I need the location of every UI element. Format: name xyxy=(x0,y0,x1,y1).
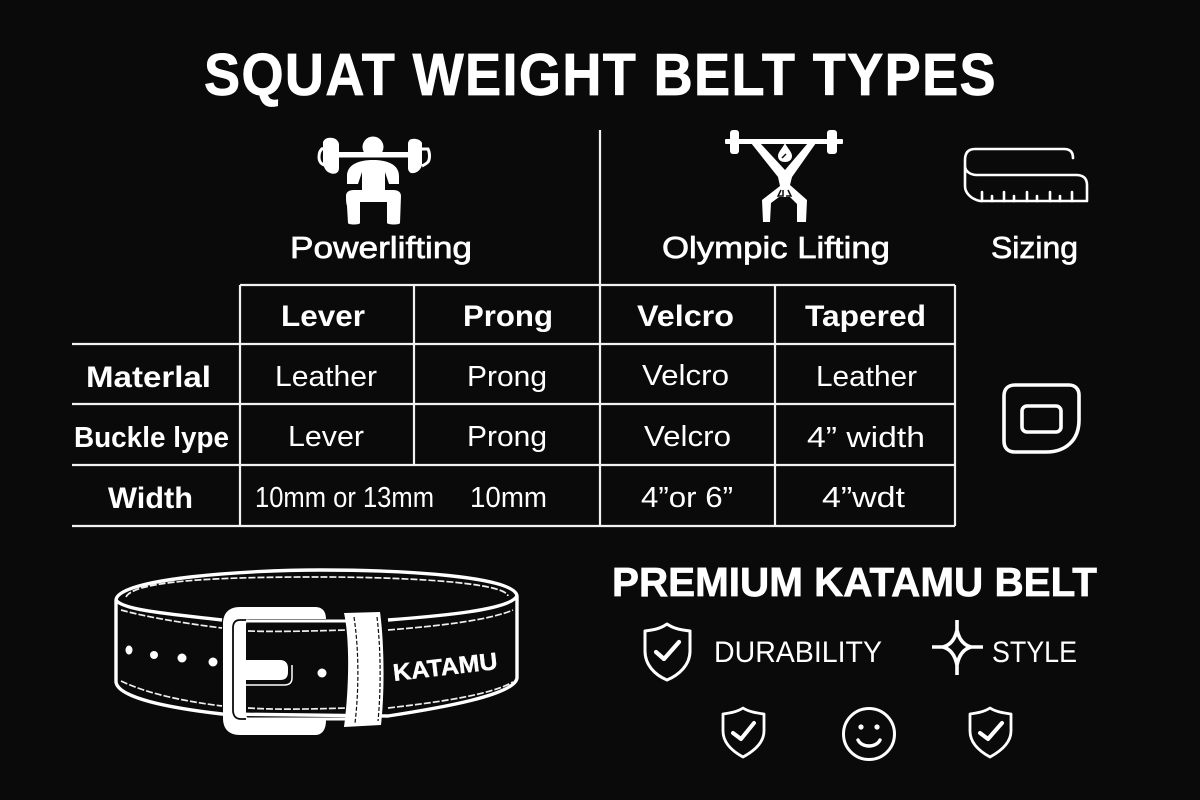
table row: buckle type: Buckle lype xyxy=(74,422,229,454)
title: SQUAT WEIGHT BELT TYPES xyxy=(204,42,997,108)
table row: buckle type xyxy=(74,421,925,454)
table row: material: Velcro xyxy=(642,360,729,392)
belt illustration xyxy=(116,570,517,735)
icon: buckle xyxy=(1004,385,1079,452)
belt keeper xyxy=(344,612,384,727)
table row: width: 10mm xyxy=(470,482,547,514)
buckle inner line xyxy=(233,620,256,719)
table row: buckle type: 4” width xyxy=(807,422,925,454)
buckle bars xyxy=(246,621,348,719)
table row: width xyxy=(108,482,905,515)
belt body xyxy=(116,570,517,716)
icon: durability shield xyxy=(645,624,690,680)
heading: premium katamu belt: PREMIUM KATAMU BELT xyxy=(612,559,1097,605)
table grid xyxy=(72,130,955,526)
keeper stitching xyxy=(354,617,380,723)
heading: Olympic Lifting: Olympic Lifting xyxy=(662,230,890,265)
icon: style sparkle xyxy=(932,620,983,675)
table row: material: Materlal xyxy=(86,361,211,394)
table row: material: Leather xyxy=(816,361,917,393)
table column headers: Prong xyxy=(463,300,553,333)
label: style: STYLE xyxy=(992,636,1077,669)
table row: width: 10mm or 13mm xyxy=(255,482,434,514)
buckle prong xyxy=(236,660,288,700)
icon: shield left xyxy=(723,708,764,757)
icon: olympic lifter xyxy=(725,130,843,222)
icon: olympic lifter details xyxy=(778,154,791,196)
table column headers xyxy=(281,300,926,333)
table row: material: Prong xyxy=(467,361,547,393)
icon: measuring tape xyxy=(965,149,1087,201)
table column headers: Velcro xyxy=(637,300,734,333)
table row: material: Leather xyxy=(275,361,377,393)
table row: buckle type: Lever xyxy=(288,421,364,453)
table row: width: 4”or 6” xyxy=(641,482,733,514)
table row: material xyxy=(86,360,917,394)
table row: width: Width xyxy=(108,482,193,515)
belt holes xyxy=(126,646,326,678)
buckle frame xyxy=(223,607,326,735)
table row: width: 4”wdt xyxy=(822,482,905,514)
prong shadow xyxy=(246,665,292,685)
belt stitching xyxy=(121,577,513,709)
label: durability: DURABILITY xyxy=(714,636,882,669)
belt brand text: KATAMU xyxy=(392,648,499,687)
heading: Powerlifting: Powerlifting xyxy=(290,230,472,265)
belt front top edge xyxy=(116,596,517,620)
icon: smiley xyxy=(844,708,894,760)
table column headers: Lever xyxy=(281,300,365,333)
table column headers: Tapered xyxy=(805,300,926,333)
table row: buckle type: Velcro xyxy=(644,421,731,453)
heading: Sizing: Sizing xyxy=(991,230,1078,265)
icon: powerlifter xyxy=(319,136,430,224)
table row: buckle type: Prong xyxy=(467,421,547,453)
icon: shield right xyxy=(970,708,1011,757)
